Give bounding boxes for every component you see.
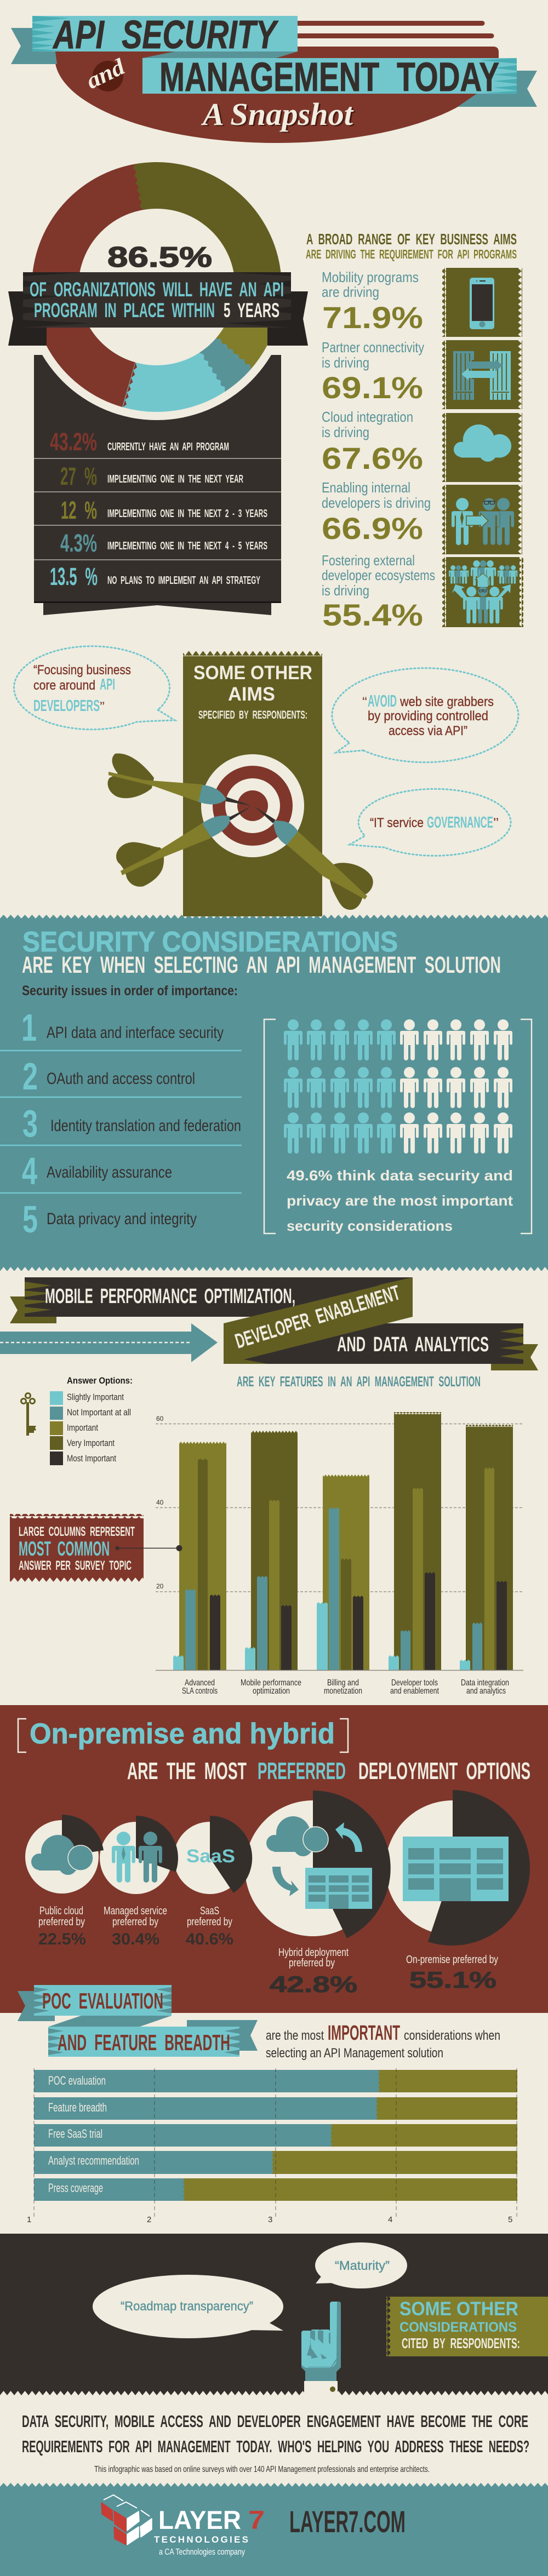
bar: Analyst recommendation bbox=[34, 2151, 517, 2174]
bar: Press coverage bbox=[34, 2178, 517, 2201]
donut knockout bbox=[24, 154, 290, 420]
icon: connectivity bbox=[442, 340, 522, 409]
speech bubble: IT governance: “IT service bbox=[370, 816, 424, 830]
icon: pointing hand bbox=[301, 2302, 341, 2395]
ribbon banner: DEVELOPER ENABLEMENT bbox=[232, 1281, 403, 1353]
group: Data integration bbox=[460, 1467, 507, 1670]
bracket bbox=[264, 1019, 532, 1234]
aim: partner connectivity: is driving bbox=[322, 354, 369, 371]
logo wordmark: 7 bbox=[248, 2505, 265, 2534]
label: managed service: preferred by bbox=[112, 1916, 158, 1928]
bar: Analyst recommendation: Analyst recommendation bbox=[48, 2154, 139, 2167]
aim: cloud integration: Cloud integration bbox=[322, 409, 413, 425]
security callout text: security considerations bbox=[287, 1218, 453, 1234]
subtitle: A Snapshot bbox=[201, 96, 354, 132]
scale grid bbox=[34, 2068, 517, 2219]
aim: internal developers: developers is driving bbox=[322, 495, 431, 511]
closing statement bbox=[22, 2412, 529, 2456]
ribbon heading: POC EVALUATION bbox=[42, 1988, 163, 2013]
bar: POC evaluation: POC evaluation bbox=[48, 2074, 106, 2087]
callout: large columns bbox=[10, 1514, 182, 1582]
chart grid: 60 bbox=[156, 1415, 164, 1422]
legend: Very Important bbox=[67, 1438, 115, 1448]
x axis labels: and analytics bbox=[466, 1686, 506, 1696]
ranked issues list: Identity translation and federation bbox=[50, 1117, 241, 1135]
icon: bullseye bbox=[201, 754, 304, 857]
logo: Layer 7 bbox=[101, 2495, 265, 2557]
left ribbon tail bbox=[11, 28, 57, 64]
group: Advanced SLA controls bbox=[173, 1459, 220, 1670]
x axis labels bbox=[182, 1678, 509, 1696]
speech bubble: avoid grabbers: AVOID bbox=[368, 691, 397, 710]
speech bubble: focusing business: “Focusing business bbox=[33, 663, 131, 678]
scale labels: 3 bbox=[268, 2215, 272, 2224]
label: public cloud: 22.5% bbox=[38, 1930, 86, 1948]
aim: external ecosystems bbox=[322, 552, 435, 632]
bar chart bbox=[156, 1412, 523, 1696]
website: LAYER7.COM bbox=[289, 2504, 406, 2539]
callout: large columns: ANSWER PER SURVEY TOPIC bbox=[19, 1558, 132, 1573]
panel: deployment options bbox=[0, 1705, 548, 2013]
stats rows: 4.3% bbox=[60, 529, 97, 557]
speech bubble: avoid grabbers: “ bbox=[362, 695, 367, 709]
speech bubble: focusing business: ” bbox=[100, 699, 105, 714]
legend: Most Important bbox=[67, 1453, 116, 1464]
bar: Feature breadth: Feature breadth bbox=[48, 2101, 107, 2114]
label: hybrid: 42.8% bbox=[270, 1971, 357, 1997]
pie: managed service bbox=[100, 1816, 178, 1894]
aim: external ecosystems: developer ecosystems bbox=[322, 567, 435, 583]
olive banner: AIMS bbox=[228, 684, 275, 705]
security callout text: privacy are the most important bbox=[287, 1192, 513, 1209]
aim: internal developers bbox=[322, 479, 431, 546]
pie: hybrid bbox=[245, 1791, 391, 1938]
section heading: ARE THE MOST bbox=[127, 1758, 247, 1785]
x axis labels: optimization bbox=[253, 1686, 290, 1696]
section heading: SECURITY CONSIDERATIONS bbox=[22, 926, 398, 958]
x axis labels: Mobile performance bbox=[241, 1678, 301, 1688]
speech bubble: avoid grabbers bbox=[332, 668, 518, 762]
source note: This infographic was based on online surveys with over 140 API Management professionals and enterprise architects. bbox=[94, 2465, 430, 2474]
panel: some other aims bbox=[14, 646, 518, 916]
label: public cloud: Public cloud bbox=[39, 1905, 83, 1917]
aim: internal developers: 66.9% bbox=[322, 511, 423, 546]
aim: partner connectivity: 69.1% bbox=[322, 370, 423, 405]
label: managed service: Managed service bbox=[104, 1905, 167, 1917]
donut chart bbox=[13, 144, 300, 431]
icon: dart lower right bbox=[254, 806, 373, 910]
aim: external ecosystems: is driving bbox=[322, 582, 369, 599]
ranked issues list: 3 bbox=[22, 1102, 38, 1145]
black ribbon: 5 YEARS bbox=[224, 299, 279, 322]
speech bubble: focusing business: DEVELOPERS bbox=[33, 697, 100, 715]
speech bubble: IT governance: GOVERNANCE bbox=[427, 814, 493, 831]
scale labels: 5 bbox=[508, 2215, 512, 2224]
list heading: Security issues in order of importance: bbox=[22, 983, 238, 999]
speech bubble: focusing business bbox=[14, 646, 175, 730]
ranked issues list: 1 bbox=[21, 1006, 37, 1049]
logo wordmark bbox=[154, 2505, 265, 2557]
aim: mobility: are driving bbox=[322, 284, 379, 300]
chart grid: 20 bbox=[156, 1582, 164, 1590]
aims heading bbox=[306, 231, 517, 261]
speech bubble: avoid grabbers: by providing controlled bbox=[368, 709, 488, 724]
stats rows: IMPLEMENTING ONE IN THE NEXT 2 - 3 YEARS bbox=[107, 508, 267, 520]
aim: cloud integration bbox=[322, 409, 423, 475]
stats rows bbox=[34, 428, 281, 590]
x axis labels: SLA controls bbox=[182, 1686, 218, 1696]
x axis labels: monetization bbox=[324, 1686, 362, 1696]
speech bubble: IT governance: ” bbox=[493, 816, 499, 830]
horizontal bar chart bbox=[27, 2068, 517, 2224]
olive banner: SOME OTHER bbox=[193, 662, 312, 684]
security callout text bbox=[287, 1167, 513, 1234]
speech bubble: avoid grabbers: access via API” bbox=[389, 724, 467, 738]
logo wordmark: TECHNOLOGIES bbox=[154, 2534, 248, 2545]
label: SaaS: SaaS bbox=[200, 1905, 219, 1917]
x axis labels: Billing and bbox=[327, 1678, 359, 1688]
speech bubble: maturity bbox=[315, 2242, 407, 2288]
bar: Press coverage: Press coverage bbox=[48, 2181, 103, 2195]
aim: cloud integration: is driving bbox=[322, 424, 369, 440]
icon: cloud bbox=[442, 413, 522, 482]
aim: mobility: 71.9% bbox=[322, 300, 423, 335]
icon: phone bbox=[442, 268, 522, 337]
label: SaaS: preferred by bbox=[187, 1916, 232, 1928]
ranked issues list: 5 bbox=[22, 1198, 38, 1241]
label: SaaS: 40.6% bbox=[186, 1930, 233, 1948]
olive considerations box: SOME OTHER bbox=[399, 2298, 518, 2320]
label: public cloud bbox=[38, 1905, 86, 1948]
speech bubble: focusing business: API bbox=[100, 676, 115, 693]
icon: internal developers bbox=[442, 485, 522, 554]
brown speed lines bbox=[298, 21, 494, 38]
ranked issues list: Availability assurance bbox=[47, 1163, 172, 1181]
stats rows: 27 % bbox=[60, 462, 97, 490]
scale labels: 4 bbox=[388, 2215, 392, 2224]
aim: external ecosystems: Fostering external bbox=[322, 552, 415, 569]
logo mark bbox=[101, 2495, 152, 2545]
section heading: PREFERRED bbox=[258, 1758, 346, 1785]
chart axis bbox=[156, 1669, 523, 1671]
title bbox=[11, 13, 537, 143]
olive considerations box bbox=[386, 2297, 548, 2356]
stats rows: 13.5 % bbox=[50, 563, 98, 590]
pie: SaaS: SaaS bbox=[186, 1846, 235, 1867]
intro text: selecting an API Management solution bbox=[266, 2046, 443, 2061]
aim: mobility bbox=[322, 269, 423, 335]
legend: Important bbox=[67, 1422, 98, 1433]
label: managed service: 30.4% bbox=[112, 1930, 159, 1948]
label: hybrid: Hybrid deployment bbox=[278, 1947, 349, 1959]
x axis labels: Advanced bbox=[185, 1678, 215, 1688]
cuff bbox=[304, 2381, 338, 2395]
legend: Answer Options: bbox=[67, 1375, 133, 1386]
icon: key bbox=[21, 1393, 36, 1436]
large columns bbox=[179, 1412, 513, 1670]
label: public cloud: preferred by bbox=[38, 1916, 85, 1928]
ranked issues list: OAuth and access control bbox=[47, 1070, 195, 1088]
and badge: and bbox=[82, 54, 129, 94]
headline figure: 86.5% bbox=[107, 242, 212, 273]
label: SaaS bbox=[186, 1905, 233, 1948]
panel: key features bbox=[0, 1277, 538, 1696]
logo wordmark: LAYER bbox=[158, 2505, 241, 2534]
ribbon heading bbox=[18, 1985, 258, 2057]
black ribbon bbox=[8, 272, 308, 346]
label: hybrid bbox=[270, 1947, 357, 1997]
intro text: considerations when bbox=[404, 2028, 500, 2043]
intro text bbox=[266, 2022, 500, 2061]
panel: POC evaluation bbox=[18, 1985, 517, 2224]
speech bubble: roadmap: “Roadmap transparency” bbox=[121, 2299, 253, 2313]
callout: large columns: LARGE COLUMNS REPRESENT bbox=[19, 1524, 135, 1539]
section heading bbox=[18, 1718, 530, 1785]
black ribbon: OF ORGANIZATIONS WILL HAVE AN API bbox=[30, 278, 284, 301]
dark stats panel bbox=[34, 355, 281, 601]
stats rows: CURRENTLY HAVE AN API PROGRAM bbox=[107, 441, 229, 453]
legend bbox=[50, 1375, 133, 1465]
ranked issues list bbox=[0, 1006, 242, 1241]
ranked issues list: 2 bbox=[22, 1055, 38, 1098]
ranked issues list: API data and interface security bbox=[47, 1024, 224, 1042]
security callout text: 49.6% think data security and bbox=[287, 1167, 513, 1184]
icon: dart upper left bbox=[107, 754, 252, 806]
ribbon: API SECURITY: API SECURITY bbox=[52, 13, 279, 57]
aim: mobility: Mobility programs bbox=[322, 269, 419, 285]
ribbon fold bbox=[142, 51, 298, 58]
stats rows: IMPLEMENTING ONE IN THE NEXT YEAR bbox=[107, 473, 243, 485]
section background bbox=[0, 1705, 548, 2013]
aim: partner connectivity bbox=[322, 339, 424, 405]
ribbon banner: MOBILE PERFORMANCE OPTIMIZATION, bbox=[45, 1285, 295, 1308]
arrow bbox=[0, 1323, 218, 1362]
intro text: are the most bbox=[266, 2028, 324, 2043]
callout: large columns: MOST COMMON bbox=[19, 1537, 110, 1560]
chart grid: 40 bbox=[156, 1499, 164, 1506]
x axis labels: Data integration bbox=[461, 1678, 509, 1688]
panel: API adoption timeline bbox=[8, 144, 308, 615]
icon: external ecosystem bbox=[442, 557, 523, 627]
group: Developer tools bbox=[389, 1488, 435, 1670]
ranked issues list: 4 bbox=[22, 1150, 37, 1192]
intro text: IMPORTANT bbox=[328, 2022, 400, 2045]
stats rows: 12 % bbox=[61, 496, 97, 524]
label: managed service bbox=[104, 1905, 167, 1948]
label: on-premise: On-premise preferred by bbox=[406, 1954, 498, 1966]
black ribbon: PROGRAM IN PLACE WITHIN bbox=[34, 299, 215, 322]
olive banner: SPECIFIED BY RESPONDENTS: bbox=[198, 709, 307, 721]
speech bubble: focusing business: core around bbox=[33, 678, 95, 693]
stats rows: IMPLEMENTING ONE IN THE NEXT 4 - 5 YEARS bbox=[107, 540, 267, 552]
olive banner bbox=[183, 651, 322, 916]
ribbon banner bbox=[10, 1277, 538, 1370]
section heading: On-premise and hybrid bbox=[30, 1718, 335, 1750]
pie: public cloud bbox=[25, 1815, 104, 1894]
brown title plate bbox=[55, 47, 499, 143]
section background bbox=[0, 919, 548, 1271]
aim: partner connectivity: Partner connectivity bbox=[322, 339, 424, 355]
bar: Feature breadth bbox=[34, 2097, 517, 2120]
panel bottom tail bbox=[43, 601, 271, 615]
ranked issues list: Data privacy and integrity bbox=[47, 1210, 197, 1228]
panel: other considerations bbox=[0, 2234, 548, 2395]
label: hybrid: preferred by bbox=[289, 1957, 335, 1969]
legend: Not Important at all bbox=[67, 1407, 131, 1418]
group: Billing and monetization bbox=[317, 1507, 363, 1670]
panel: security considerations bbox=[0, 909, 548, 1271]
pie: on-premise bbox=[385, 1790, 530, 1946]
section background bbox=[0, 2234, 548, 2395]
pie: SaaS bbox=[174, 1816, 252, 1894]
logo wordmark: a CA Technologies company bbox=[159, 2548, 245, 2557]
label: on-premise bbox=[406, 1954, 498, 1993]
bar: POC evaluation bbox=[34, 2070, 517, 2092]
subtitle: A Snapshot bbox=[203, 97, 356, 133]
speech bubble: maturity: “Maturity” bbox=[335, 2258, 390, 2273]
chart grid bbox=[156, 1415, 523, 1592]
section heading bbox=[22, 926, 501, 978]
speech bubble: roadmap bbox=[93, 2275, 283, 2338]
right ribbon tail bbox=[458, 71, 537, 107]
people grid: half of respondents bbox=[284, 1019, 512, 1154]
label: on-premise: 55.1% bbox=[409, 1967, 496, 1993]
ribbon heading: AND FEATURE BREADTH bbox=[58, 2030, 230, 2055]
olive considerations box: CONSIDERATIONS bbox=[399, 2320, 517, 2335]
aim: external ecosystems: 55.4% bbox=[322, 598, 423, 632]
stats rows: NO PLANS TO IMPLEMENT AN API STRATEGY bbox=[107, 575, 260, 587]
speech bubble: avoid grabbers: web site grabbers bbox=[399, 695, 494, 709]
bar: Free SaaS trial: Free SaaS trial bbox=[48, 2127, 102, 2141]
bar: Free SaaS trial bbox=[34, 2124, 517, 2147]
speech bubble: IT governance bbox=[350, 789, 511, 856]
aim: internal developers: Enabling internal bbox=[322, 479, 410, 496]
scale labels: 2 bbox=[147, 2215, 151, 2224]
legend: Slightly Important bbox=[67, 1392, 124, 1402]
x axis labels: and enablement bbox=[390, 1686, 439, 1696]
footer bbox=[0, 2483, 548, 2576]
group: Mobile performance bbox=[245, 1500, 292, 1670]
scale labels bbox=[27, 2215, 512, 2224]
aim: cloud integration: 67.6% bbox=[322, 441, 423, 475]
panel: business aims bbox=[306, 231, 523, 632]
scale labels: 1 bbox=[27, 2215, 31, 2224]
icon: dart lower left bbox=[116, 806, 252, 887]
x axis labels: Developer tools bbox=[391, 1678, 438, 1688]
stats rows: 43.2% bbox=[50, 428, 97, 456]
